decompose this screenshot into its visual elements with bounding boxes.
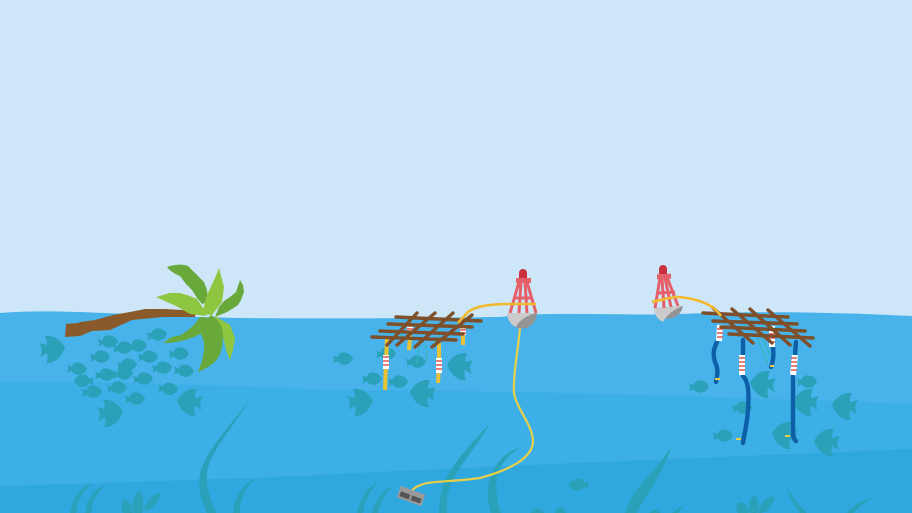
small school fish [67,327,194,405]
blue rope 1 [714,342,717,382]
palm tree [65,265,244,372]
large fish: left of school [39,336,65,363]
seagrass tufts [70,479,875,513]
large fish: right of school [177,389,203,416]
fish around second raft [569,371,858,491]
buoy float highlight [507,313,537,327]
seaweed on ropes [386,330,440,364]
concrete anchor block [397,486,425,506]
seaweed leaves: left plant [121,491,160,513]
sea: top water layer [0,311,912,513]
buoy yellow band and rope to raft [458,304,536,323]
palm leaf: lower left [163,317,212,343]
buoy float [507,313,537,328]
buoy platform [516,278,531,283]
yellow rope tags [715,366,790,439]
seaweed under raft [742,325,798,364]
seaweed mounds [531,507,660,513]
fish school near palm [39,327,203,427]
palm leaf: right [215,280,244,317]
striped rope sleeves [717,325,797,375]
blue rope 3 [771,347,773,367]
buoy float [654,306,683,319]
seagrass [70,400,875,513]
fish around first raft [333,347,473,416]
yellow hanging ropes [385,327,463,390]
palm leaf: top left [167,265,208,304]
blue rope 4 [793,342,796,441]
sea: deep water layer [0,449,912,513]
seagrass blade: centre [439,423,490,513]
buoy tower [510,282,536,313]
seagrass blade: right [625,445,672,513]
mooring rope from first buoy to anchor [412,328,533,491]
raft lattice [372,313,481,347]
large fish: below school [97,400,123,427]
buoy platform [657,274,671,279]
buoy lamp [519,269,527,278]
seaweed leaves: right plant [737,495,774,513]
palm leaf: upper centre [202,268,224,315]
palm leaf: left [156,293,206,316]
first raft with ropes [372,313,481,390]
buoy tower [655,277,678,308]
blue rope 2 [743,340,748,443]
striped rope sleeves [383,325,466,373]
palm leaf: lower right [215,316,235,360]
seagrass blade: beside rope [488,448,520,513]
seagrass blade: tall left [199,400,249,513]
buoy float highlight [654,306,683,322]
second buoy [652,265,721,322]
buoy lamp [659,265,667,274]
buoy yellow band and rope to raft [652,297,721,316]
palm trunk [65,309,196,337]
sea: middle water layer [0,382,912,513]
first buoy [458,269,537,328]
second raft with ropes [703,308,813,443]
raft lattice [703,308,813,346]
palm leaf: lower centre [198,315,223,372]
